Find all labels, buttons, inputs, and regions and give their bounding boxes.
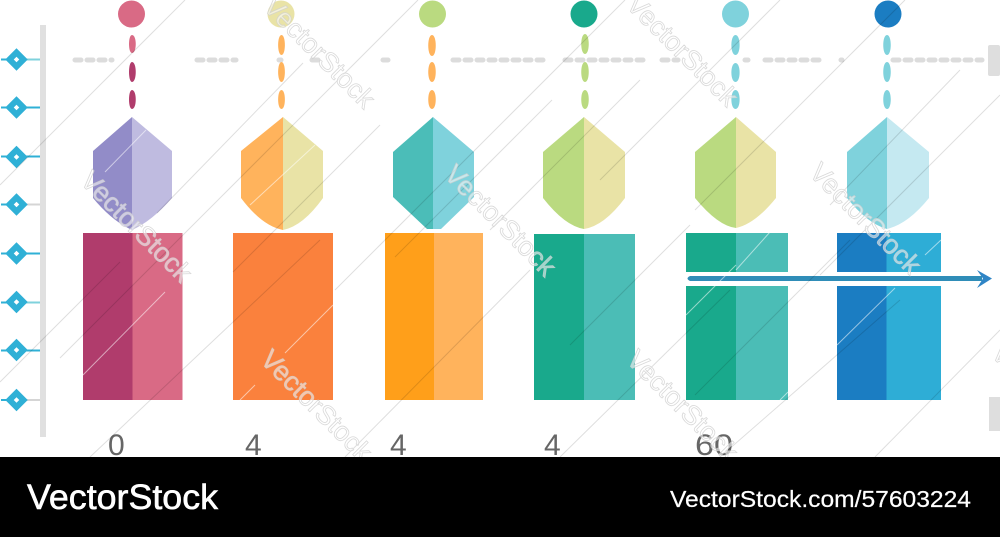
column 6 — [837, 0, 941, 400]
column 4 — [534, 0, 635, 400]
right edge brackets — [988, 45, 1000, 431]
VectorStock watermarks: VectorStock — [621, 344, 744, 467]
number labels — [108, 429, 733, 462]
number labels: 4 — [390, 429, 407, 462]
footer image id: VectorStock.com/57603224 — [670, 486, 971, 512]
column 5 — [686, 0, 788, 400]
number labels: 0 — [108, 429, 125, 462]
VectorStock watermarks: VectorStock — [804, 157, 927, 280]
column 3 — [385, 0, 483, 400]
number labels: 60 — [695, 429, 733, 462]
column 2 — [233, 0, 333, 400]
VectorStock watermarks: VectorStock — [439, 159, 562, 282]
footer bar — [0, 457, 1000, 537]
footer logo text: VectorStock — [27, 478, 219, 517]
number labels: 4 — [245, 429, 262, 462]
VectorStock watermarks: VectorStock — [255, 344, 378, 467]
column 1 — [83, 0, 182, 400]
number labels: 4 — [544, 429, 561, 462]
VectorStock watermarks: VectorStock — [75, 165, 198, 288]
vertical axis with markers — [1, 25, 46, 437]
dashed horizontal guide line — [75, 58, 982, 62]
arrow — [688, 270, 992, 288]
